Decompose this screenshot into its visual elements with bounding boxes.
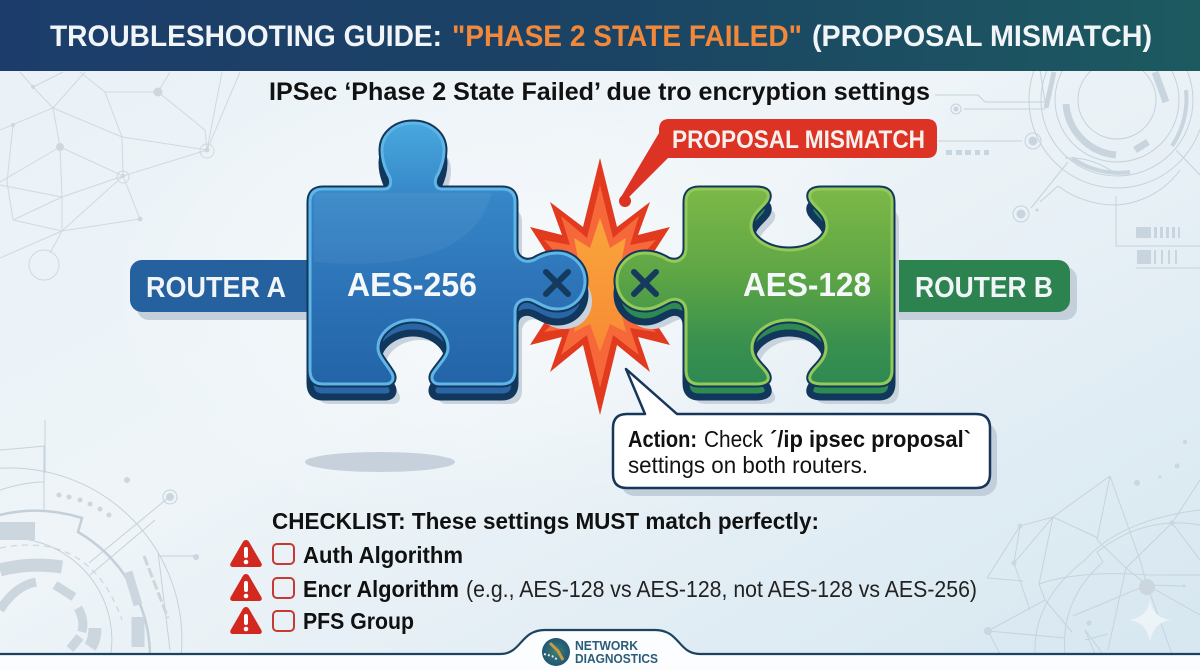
checklist item: encr algorithm xyxy=(230,574,977,602)
puzzle piece: blue AES-256 xyxy=(310,123,592,404)
checklist item: encr algorithm: Encr Algorithm xyxy=(303,576,459,602)
callout: action: Action: xyxy=(628,426,697,452)
router A label: ROUTER A xyxy=(146,272,286,304)
explosion burst xyxy=(530,158,670,415)
callout: action: Check xyxy=(704,426,763,452)
title xyxy=(50,20,1152,53)
title: (PROPOSAL MISMATCH) xyxy=(812,20,1152,53)
ground shadow xyxy=(305,452,455,472)
checklist item: auth algorithm xyxy=(230,540,463,568)
checklist heading: CHECKLIST: These settings MUST match perfectly: xyxy=(272,508,819,534)
warning icon xyxy=(230,574,262,601)
router A label xyxy=(130,260,327,320)
title: TROUBLESHOOTING GUIDE: xyxy=(50,20,442,53)
callout: proposal mismatch: PROPOSAL MISMATCH xyxy=(672,126,925,154)
subtitle: IPSec ‘Phase 2 State Failed’ due tro encryption settings xyxy=(269,78,930,106)
circuit pattern bottom left xyxy=(0,420,199,653)
logo: DIAGNOSTICS xyxy=(575,652,658,666)
mismatch x mark xyxy=(634,272,656,294)
checklist item: auth algorithm: Auth Algorithm xyxy=(303,542,463,568)
logo xyxy=(542,638,658,666)
checklist item: encr algorithm: (e.g., AES-128 vs AES-128, not AES-128 vs AES-256) xyxy=(466,576,977,602)
logo: NETWORK xyxy=(575,639,638,653)
label AES-128: AES-128 xyxy=(743,266,871,303)
warning icon xyxy=(230,607,262,634)
mismatch x mark xyxy=(546,272,568,294)
router B label: ROUTER B xyxy=(915,272,1053,304)
title: "PHASE 2 STATE FAILED" xyxy=(452,20,802,53)
puzzle piece: green AES-128 xyxy=(617,189,899,404)
warning icon xyxy=(230,540,262,567)
checklist item: PFS group xyxy=(230,607,414,634)
checklist item: PFS group: PFS Group xyxy=(303,608,414,634)
network pattern bottom right xyxy=(984,440,1200,654)
callout: proposal mismatch xyxy=(619,119,937,207)
label AES-256: AES-256 xyxy=(347,266,477,303)
router B label xyxy=(880,260,1077,320)
callout: action: settings on both routers. xyxy=(628,452,868,478)
circuit pattern top right xyxy=(935,71,1200,268)
callout: action: ´/ip ipsec proposal` xyxy=(770,426,971,452)
footer band xyxy=(0,630,1200,670)
callout: action xyxy=(613,369,997,496)
network pattern top left xyxy=(0,72,240,280)
header banner xyxy=(0,0,1200,71)
